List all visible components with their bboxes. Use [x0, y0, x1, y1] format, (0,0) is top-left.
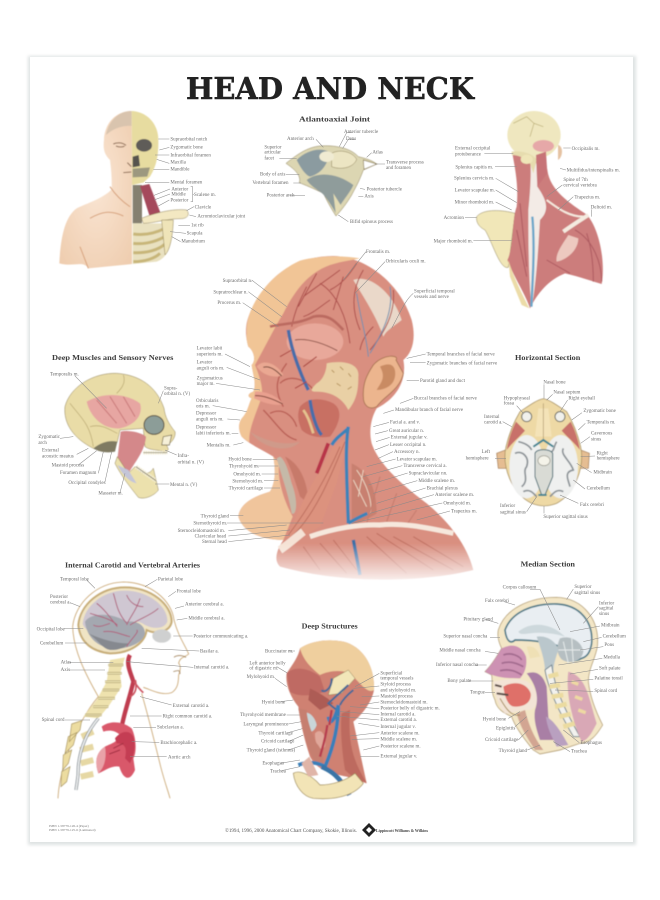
labels: atlantoaxial joint: Dens	[346, 137, 356, 142]
labels: deep muscles: orbital n. (V)	[164, 392, 190, 397]
labels: carotid panel: Right common carotid a.	[163, 714, 212, 719]
labels: atlantoaxial joint: facet	[264, 156, 275, 161]
labels: deep structures right side: Mastoid process	[380, 694, 413, 699]
labels: main figure left side: Depressor	[196, 426, 217, 431]
labels: anterior figure: Zygomatic bone	[170, 146, 204, 151]
labels: posterior figure: cervical vertebra	[563, 184, 597, 189]
labels: atlantoaxial joint: and foramen	[386, 166, 412, 171]
labels: deep structures left side: Thyrohyoid membrane	[240, 713, 287, 718]
labels: deep muscles: arch	[38, 441, 47, 446]
labels: main figure right side: Superficial temporal	[414, 289, 455, 294]
labels: main figure left side: major m.	[197, 382, 215, 387]
labels: median section: Esophagus	[580, 741, 602, 746]
labels: main figure left side: Mentalis m.	[207, 443, 230, 448]
labels: horizontal section: Zygomatic bone	[583, 409, 617, 414]
labels: carotid panel: Brachiocephalic a.	[160, 741, 197, 746]
labels: main figure left side: Thyroid gland	[201, 514, 230, 519]
labels: deep structures left side: Buccinator m.	[265, 649, 293, 654]
labels: median section: Spinal cord	[594, 689, 618, 694]
labels: median section: Midbrain	[601, 624, 620, 629]
labels: anterior figure: Mandible	[170, 168, 190, 173]
labels: posterior figure: Multifidus/interspinalis m.	[567, 168, 620, 173]
figure: head outline with brain and arteries	[58, 582, 189, 798]
labels: deep structures right side: External carotid a.	[380, 718, 417, 723]
labels: carotid panel: Internal carotid a.	[194, 666, 229, 671]
labels: main figure left side	[178, 279, 323, 545]
panel: deep muscles and sensory nerves	[38, 354, 204, 498]
labels: median section: Pituitary gland	[463, 617, 493, 622]
labels: main figure right side: Levator scapulae m.	[397, 457, 437, 462]
labels: posterior figure: Splenius capitis m.	[455, 165, 493, 170]
labels: main figure left side: oris m.	[196, 404, 210, 409]
labels: main figure left side: Orbicularis	[196, 399, 218, 404]
labels: atlantoaxial joint: Vertebral foramen	[252, 181, 289, 186]
labels: carotid panel: cerebral a.	[50, 601, 71, 606]
heading: internal carotid and vertebral arteries: Internal Carotid and Vertebral Arteries	[65, 561, 200, 569]
labels: anterior figure: Infraorbital foramen	[170, 153, 211, 158]
labels: atlantoaxial joint: Transverse process	[386, 161, 424, 166]
labels: anterior figure: Scalene m.	[194, 193, 216, 198]
labels: atlantoaxial joint: Posterior tubercle	[367, 187, 403, 192]
labels: horizontal section: carotid a.	[484, 421, 503, 426]
labels: anterior figure: Manubrium	[181, 239, 205, 244]
labels: horizontal section: hemisphere	[597, 457, 620, 462]
figure and labels: deep neck structures	[286, 623, 440, 799]
labels: posterior figure: Acromion	[444, 216, 464, 221]
labels: median section: Hyoid bone	[483, 718, 507, 723]
labels: deep structures left side: of digastric m.	[249, 667, 278, 672]
footer: publisher logo: Lippincott Williams & Wilkins	[376, 828, 428, 833]
panel: median section	[436, 560, 626, 755]
labels: atlantoaxial joint: Superior	[264, 145, 282, 150]
labels: main figure left side: superioris m.	[197, 352, 223, 357]
labels: atlantoaxial joint: Bifid spinous process	[350, 220, 393, 225]
labels: posterior figure: Splenius cervicis m.	[454, 177, 494, 182]
labels: deep structures right side: Styloid process	[380, 683, 411, 688]
labels: deep structures left side: Trachea	[270, 769, 287, 774]
labels: carotid panel: Posterior communicating a.	[193, 634, 248, 639]
labels: anterior figure: Clavicle	[195, 205, 212, 210]
labels: horizontal section: fossa	[504, 402, 515, 407]
labels: median section: Superior nasal concha	[443, 635, 488, 640]
footer: ISBN numbers: ISBN 1-58779-125-6 (Laminated)	[49, 828, 96, 832]
labels: deep structures right side: temporal vessels	[380, 677, 413, 682]
labels: main figure right side: Brachial plexus	[427, 486, 458, 491]
labels: carotid panel: Basilar a.	[200, 650, 219, 655]
labels: horizontal section: Left	[482, 450, 491, 455]
labels: carotid panel: Temporal lobe	[60, 577, 90, 582]
labels: main figure right side: Transverse cervical a.	[403, 464, 447, 469]
labels: horizontal section: sinus	[591, 437, 601, 442]
labels: carotid panel: Axis	[61, 668, 70, 673]
labels: main figure right side: Middle scalene m.	[418, 479, 455, 484]
labels: atlantoaxial joint: Axis	[364, 195, 374, 200]
labels: median section: Superior	[574, 585, 592, 590]
labels: horizontal section: sagittal sinus	[500, 510, 526, 515]
labels: horizontal section: Cerebellum	[587, 487, 610, 492]
panel: anterior half skin half skeleton	[59, 111, 246, 268]
labels: median section: sagittal sinus	[574, 591, 600, 596]
labels: posterior figure: Deltoid m.	[591, 205, 612, 210]
panel: atlantoaxial joint	[252, 116, 424, 225]
labels: deep muscles	[38, 372, 204, 497]
figure: skull with temporalis	[65, 373, 175, 498]
labels: deep structures left side: Esophagus	[262, 762, 284, 767]
footer: ISBN numbers	[49, 824, 96, 832]
labels: deep muscles: Foramen magnum	[60, 471, 97, 476]
labels: main figure left side: Depressor	[196, 412, 217, 417]
labels: main figure right side: Anterior scalene m.	[435, 493, 474, 498]
panel: internal carotid and vertebral arteries	[37, 561, 248, 798]
labels: main figure right side: Frontalis m.	[366, 250, 390, 255]
labels: main figure left side: Sternohyoid m.	[232, 479, 263, 484]
labels: horizontal section	[466, 381, 620, 520]
labels: main figure left side: Procerus m.	[217, 301, 241, 306]
labels: horizontal section: Hypophyseal	[504, 396, 531, 401]
labels: main figure right side: Mandibular branch of facial nerve	[395, 408, 464, 413]
labels: deep structures left side	[240, 649, 303, 774]
labels: main figure left side: Levator	[197, 361, 213, 366]
labels: carotid panel: Middle cerebral a.	[188, 616, 225, 621]
labels: median section: Middle nasal concha	[439, 649, 481, 654]
labels: posterior figure: Minor rhomboid m.	[455, 201, 494, 206]
labels: deep muscles: Mastoid process	[52, 464, 84, 469]
footer: copyright line: ©1994, 1996, 2000 Anatomical Chart Company, Skokie, Illinois.	[225, 828, 357, 834]
labels: atlantoaxial joint: Atlas	[372, 151, 383, 156]
heading: deep muscles and sensory nerves: Deep Muscles and Sensory Nerves	[52, 354, 174, 362]
labels: main figure right side: vessels and nerve	[414, 295, 450, 300]
labels: carotid panel: Spinal cord	[42, 718, 65, 723]
labels: deep structures right side: Internal carotid a.	[380, 713, 416, 718]
labels: deep muscles: orbital n. (V)	[178, 460, 204, 465]
labels: median section: Inferior nasal concha	[436, 663, 479, 668]
labels: posterior figure	[434, 147, 620, 244]
labels: median section: Cerebellum	[603, 634, 626, 639]
figure: superficial head and neck muscles	[238, 256, 480, 587]
labels: deep muscles: Temporalis m.	[50, 372, 79, 377]
labels: main figure left side: labii inferioris m.	[196, 431, 231, 436]
labels: main figure right side: Temporal branches of facial nerve	[427, 353, 495, 358]
labels: deep structures left side: Mylohyoid m.	[247, 675, 275, 680]
labels: deep muscles: Masseter m.	[98, 492, 123, 497]
panel: main head and neck dissection	[178, 250, 498, 587]
labels: carotid panel: Posterior	[50, 595, 68, 600]
labels: deep muscles: Occipital condyles	[68, 481, 106, 486]
labels: atlantoaxial joint: Posterior arch	[267, 193, 295, 198]
labels: posterior figure: Spine of 7th	[563, 178, 588, 183]
labels: anterior figure: Middle	[171, 192, 187, 197]
labels: carotid panel: Atlas	[61, 661, 71, 666]
labels: deep structures right side: Sternocleidomastoid m.	[380, 700, 428, 705]
labels: main figure left side: Sternothyroid m.	[193, 522, 227, 527]
labels: horizontal section: Nasal bone	[543, 381, 566, 386]
labels: deep structures right side: Internal jugular v.	[380, 725, 416, 730]
labels: atlantoaxial joint: Anterior tubercle	[344, 130, 379, 135]
labels: deep muscles: Mental n. (V)	[170, 483, 198, 488]
labels: median section: Bony palate	[447, 679, 472, 684]
labels: horizontal section: Falx cerebri	[580, 503, 605, 508]
panel: horizontal section	[466, 354, 620, 520]
labels: atlantoaxial joint: Anterior arch	[287, 137, 314, 142]
labels: median section: Soft palate	[599, 666, 621, 671]
labels: deep muscles: Supra-	[164, 387, 178, 392]
labels: main figure right side: Trapezius m.	[451, 509, 477, 514]
labels: main figure left side: Clavicular head	[195, 535, 227, 540]
labels: deep structures left side: Thyroid gland (isthmus)	[247, 749, 295, 754]
labels: carotid panel: Subclavian a.	[157, 726, 184, 731]
labels: deep structures right side: Posterior belly of digastric m.	[380, 707, 440, 712]
labels: atlantoaxial joint: articular	[264, 151, 281, 156]
labels: carotid panel: Aortic arch	[168, 755, 191, 760]
labels: main figure left side: Zygomaticus	[197, 376, 223, 381]
labels: median section: Tongue	[470, 691, 486, 696]
labels: anterior figure: Acromioclavicular joint	[197, 215, 246, 220]
labels: posterior figure: External occipital	[455, 147, 491, 152]
labels: horizontal section: Right	[597, 451, 608, 456]
labels: deep structures right side: and stylohyoid m.	[380, 688, 416, 693]
labels: main figure right side: Lesser occipital n.	[390, 443, 426, 448]
labels: median section: Inferior	[599, 601, 615, 606]
labels: main figure right side: Zygomatic branches of facial nerve	[427, 361, 498, 366]
labels: main figure right side: Supraclavicular nn.	[409, 471, 447, 476]
labels: deep structures right side	[337, 671, 440, 760]
labels: median section: Palatine tonsil	[594, 677, 623, 682]
figure: horizontal brain section	[497, 399, 589, 506]
labels: horizontal section: Superior sagittal sinus	[543, 515, 588, 520]
labels: median section: Cricoid cartilage	[485, 738, 519, 743]
footer: ISBN numbers: ISBN 1-58779-126-4 (Paper)	[49, 824, 89, 828]
labels: anterior figure: Scapula	[187, 232, 203, 237]
panel: deep structures	[240, 623, 440, 799]
labels: deep structures left side: Left anterior belly	[249, 661, 286, 666]
labels: deep structures right side: Superficial	[380, 671, 403, 676]
labels: posterior figure: Major rhomboid m.	[434, 239, 473, 244]
labels: deep structures left side: Hyoid bone	[262, 700, 286, 705]
labels: carotid panel: Parietal lobe	[158, 577, 184, 582]
labels: horizontal section: Inferior	[500, 504, 516, 509]
labels: anterior figure: Anterior	[171, 187, 189, 192]
labels: median section: sinus	[599, 612, 609, 617]
labels: carotid panel: Anterior cerebral a.	[185, 603, 224, 608]
heading: median section: Median Section	[521, 560, 575, 568]
footer: publisher logo	[362, 823, 428, 837]
labels: horizontal section: Nasal septum	[553, 390, 580, 395]
labels: main figure right side: Accessory n.	[394, 450, 420, 455]
labels: atlantoaxial joint: Body of axis	[260, 173, 286, 178]
labels: median section: Trachea	[571, 750, 588, 755]
labels: deep muscles: Zygomatic	[38, 435, 61, 440]
labels: median section: Medulla	[603, 656, 621, 661]
labels: deep structures left side: Cricoid cartilage	[261, 740, 295, 745]
labels: main figure left side: Levator labii	[197, 347, 223, 352]
panel: posterior neck and back	[434, 111, 620, 308]
labels: main figure left side: Omohyoid m.	[233, 473, 261, 478]
labels: main figure right side: Omohyoid m.	[443, 501, 471, 506]
labels: main figure right side: Facial a. and v.	[390, 421, 420, 426]
labels: deep muscles: External	[42, 448, 59, 453]
figure: man and skeleton	[59, 111, 188, 268]
labels: horizontal section: Right eyeball	[568, 396, 596, 401]
labels: median section: sagittal	[599, 607, 614, 612]
figure: atlas and axis vertebrae	[286, 146, 377, 216]
labels: horizontal section: Temporalis m.	[587, 420, 615, 425]
labels: deep muscles: acoustic meatus	[42, 455, 74, 460]
labels: anterior figure: Supraorbital notch	[170, 137, 208, 142]
labels: carotid panel: External carotid a.	[173, 704, 209, 709]
labels: deep structures right side: External jugular v.	[380, 755, 417, 760]
labels: horizontal section: Cavernous	[591, 432, 612, 437]
labels: posterior figure: protuberance	[455, 152, 482, 157]
labels: median section: Epiglottis	[496, 726, 515, 731]
labels: posterior figure: Occipitalis m.	[572, 147, 600, 152]
labels: horizontal section: Midbrain	[593, 471, 612, 476]
labels: main figure right side: Orbicularis oculi m.	[386, 260, 426, 265]
labels: carotid panel: Frontal lobe	[177, 589, 202, 594]
labels: median section: Thyroid gland	[499, 749, 528, 754]
labels: atlantoaxial joint	[252, 130, 424, 225]
labels: anterior figure: Posterior	[170, 198, 189, 203]
labels: deep structures left side: Thyroid cartilage	[258, 731, 294, 736]
labels: carotid panel	[37, 577, 248, 760]
heading: horizontal section: Horizontal Section	[515, 354, 580, 362]
labels: main figure right side: Great auricular n.	[389, 429, 424, 434]
title: HEAD AND NECK	[186, 71, 475, 106]
labels: median section	[436, 585, 626, 755]
labels: carotid panel: Cerebellum	[40, 642, 63, 647]
labels: main figure left side: anguli oris m.	[196, 418, 224, 423]
labels: main figure right side: Parotid gland and duct	[420, 379, 466, 384]
labels: main figure right side: Buccal branches of facial nerve	[414, 397, 478, 402]
labels: main figure left side: anguli oris m.	[197, 366, 224, 371]
labels: deep structures right side: Posterior scalene m.	[380, 745, 421, 750]
heading: deep structures: Deep Structures	[302, 623, 358, 631]
labels: horizontal section: Internal	[484, 415, 500, 420]
labels: main figure right side	[343, 250, 498, 523]
figure: posterior skull and muscles	[477, 111, 603, 308]
labels: main figure left side: Sternal head	[202, 540, 227, 545]
labels: anterior figure: Mental foramen	[170, 180, 203, 185]
labels: anterior figure: Maxilla	[170, 161, 187, 166]
labels: anterior figure	[145, 137, 246, 244]
labels: posterior figure: Levator scapulae m.	[455, 189, 495, 194]
labels: median section: Falx cerebri	[485, 599, 510, 604]
labels: main figure right side: External jugular v.	[391, 436, 428, 441]
labels: median section: Corpus callosum	[503, 586, 536, 591]
heading: atlantoaxial joint: Atlantoaxial Joint	[299, 116, 371, 124]
labels: main figure left side: Sternocleidomastoid m.	[178, 529, 225, 534]
figure: median section of head and neck	[485, 597, 603, 754]
labels: deep muscles: Infra-	[178, 454, 189, 459]
labels: main figure left side: Thyroid cartilage	[229, 487, 264, 492]
labels: main figure left side: Thyrohyoid m.	[229, 465, 259, 470]
labels: deep structures right side: Anterior scalene m.	[380, 731, 420, 736]
figure: deep dissection of the neck	[286, 640, 374, 799]
labels: main figure left side: Hyoid bone	[228, 458, 253, 463]
labels: deep structures left side: Laryngeal prominence	[243, 723, 289, 728]
labels: median section: Pons	[604, 643, 614, 648]
labels: posterior figure: Trapezius m.	[574, 195, 600, 200]
labels: deep structures right side: Middle scalene m.	[380, 737, 417, 742]
labels: main figure left side: Supratrochlear n.	[213, 291, 248, 296]
labels: main figure left side: Supraorbital n.	[223, 279, 252, 284]
labels: carotid panel: Occipital lobe	[37, 627, 66, 632]
labels: anterior figure: 1st rib	[191, 224, 204, 229]
labels: horizontal section: hemisphere	[466, 456, 489, 461]
